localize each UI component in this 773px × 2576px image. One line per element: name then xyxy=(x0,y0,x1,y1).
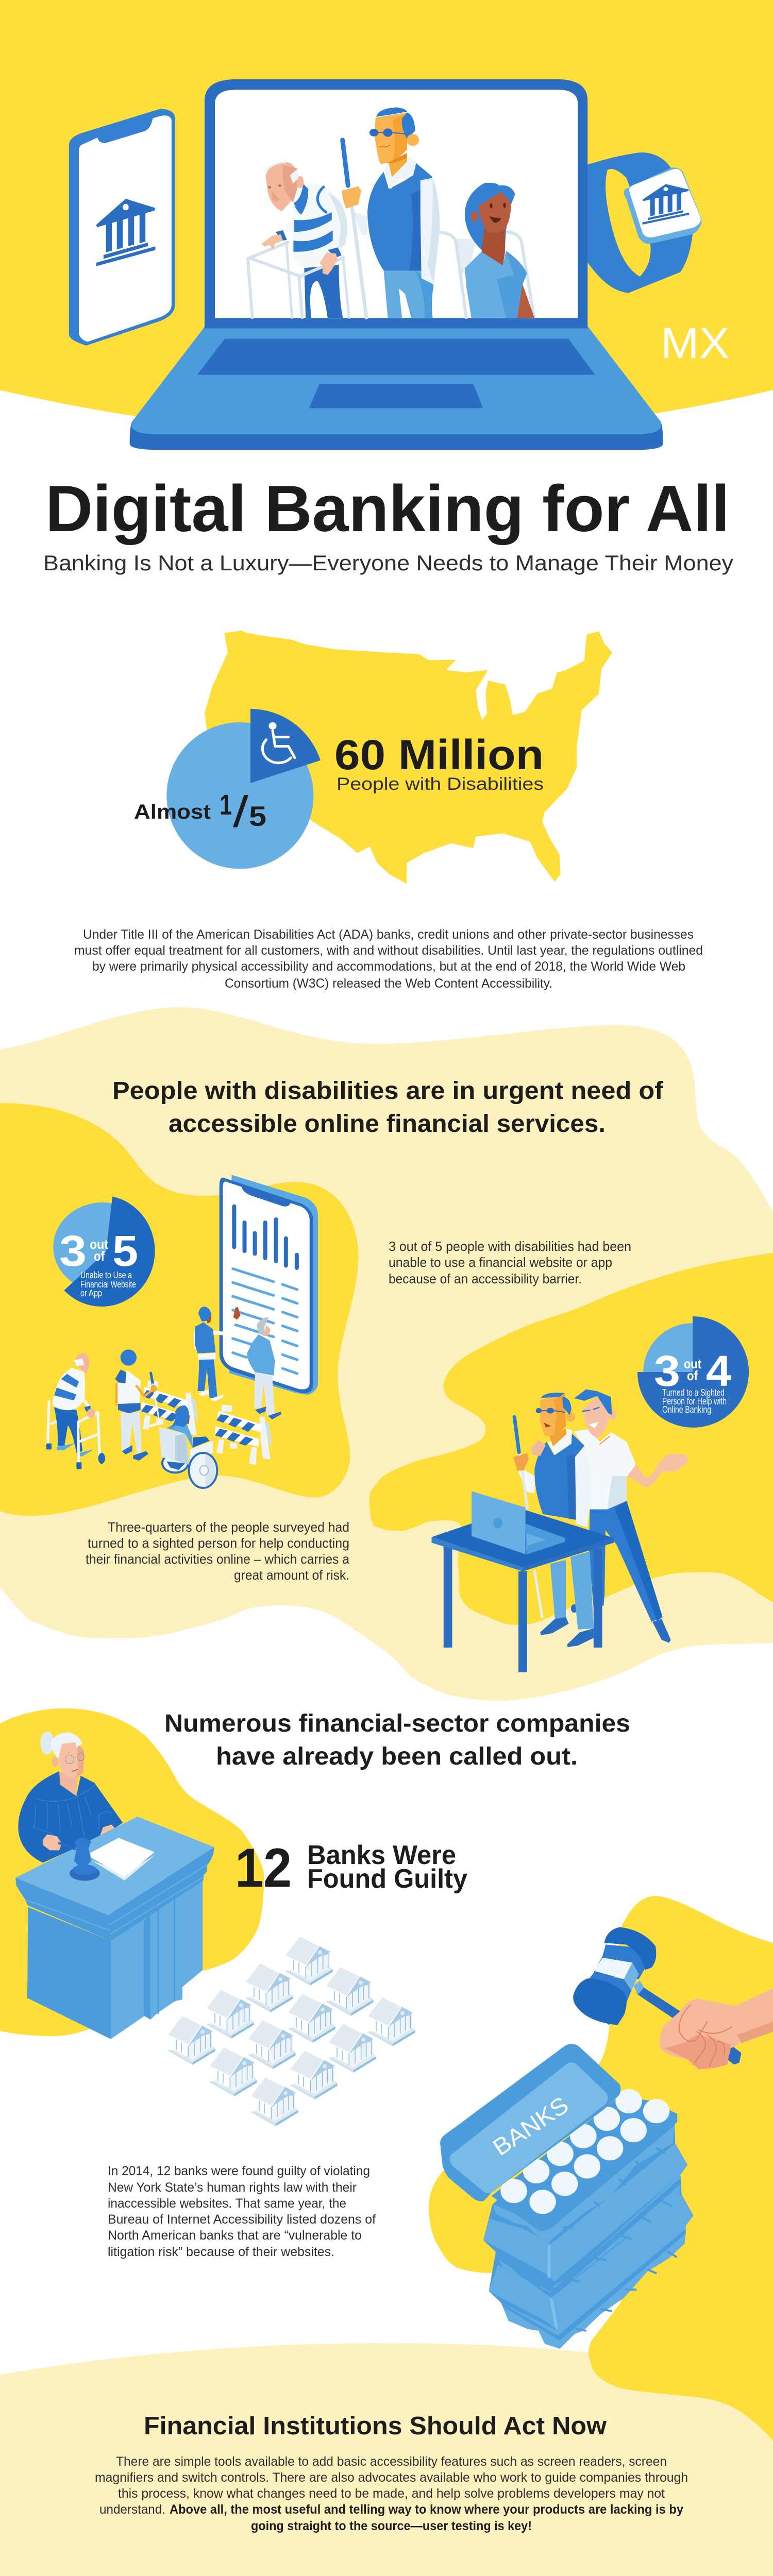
stat: almost one fifth: Almost xyxy=(134,801,211,823)
pie chart: 3 out of 5: or App xyxy=(80,1288,102,1298)
pie chart: 3 out of 5: Financial Website xyxy=(80,1279,136,1290)
text: act now paragraph xyxy=(95,2454,688,2533)
text: 3 out of 5 unable xyxy=(389,1239,631,1286)
barrier xyxy=(141,1381,198,1441)
text: 2014 banks found guilty: inaccessible websites. That same year, the xyxy=(108,2196,346,2211)
text: act now paragraph: this process, know what changes need to be made, and help solve problems developers may not xyxy=(118,2486,665,2501)
section heading: urgent need xyxy=(112,1077,664,1138)
pie chart: 3 out of 4: out xyxy=(684,1356,701,1371)
background blob: right yellow xyxy=(429,1896,773,2441)
title: Digital Banking for All xyxy=(45,472,730,545)
person: tall man with cane and glasses xyxy=(342,107,440,318)
stat: 12 banks found guilty: Banks Were xyxy=(307,1840,456,1870)
stat: 60 million xyxy=(334,732,544,794)
map and pie chart xyxy=(166,631,612,884)
pie chart: 3 out of 4 xyxy=(637,1316,749,1428)
background blob: lower pale yellow section xyxy=(0,2343,773,2576)
person: old man with walker xyxy=(46,1353,105,1469)
person: woman with cane xyxy=(115,1349,160,1461)
person: woman in wheelchair xyxy=(441,183,534,318)
text: act now paragraph: There are simple tools available to add basic accessibility features such as screen readers, screen xyxy=(116,2454,667,2469)
stat: 12 banks found guilty xyxy=(235,1837,467,1899)
section heading: called out: Numerous financial-sector companies xyxy=(164,1710,630,1737)
illustration: sighted friend helping at laptop xyxy=(431,1389,688,1672)
text: 2014 banks found guilty xyxy=(108,2164,376,2259)
subtitle: Banking Is Not a Luxury—Everyone Needs to Manage Their Money xyxy=(43,551,733,575)
stat: almost one fifth: 5 xyxy=(249,800,266,832)
text: three-quarters sighted help: turned to a sighted person for help conducting xyxy=(88,1535,349,1551)
gavel, hand and egg cartons xyxy=(440,1927,773,2349)
stat: almost one fifth xyxy=(134,788,266,837)
people on laptop screen xyxy=(248,107,534,318)
person: friend in white shirt xyxy=(571,1389,688,1643)
illustration: people at inaccessible phone xyxy=(46,1307,281,1488)
pie chart: 3 out of 4: of xyxy=(687,1368,698,1383)
hero devices xyxy=(69,79,701,450)
text: act now paragraph: going straight to the source—user testing is key! xyxy=(251,2519,532,2533)
stat: 12 banks found guilty: 12 xyxy=(235,1837,292,1899)
intro paragraph: Under Title III of the American Disabilities Act (ADA) banks, credit unions and other private-sector businesses xyxy=(83,927,694,942)
carton lid xyxy=(440,2044,620,2201)
pie chart: 3 out of 5 xyxy=(53,1196,155,1307)
stacked tray backing xyxy=(483,2096,693,2349)
text: 3 out of 5 unable: 3 out of 5 people with disabilities had been xyxy=(389,1239,631,1254)
section heading: called out xyxy=(164,1710,630,1770)
gavel xyxy=(573,1927,742,2064)
text: 3 out of 5 unable: unable to use a financial website or app xyxy=(389,1255,612,1270)
text: 2014 banks found guilty: North American banks that are “vulnerable to xyxy=(108,2228,362,2243)
person: judge xyxy=(18,1732,123,1863)
intro paragraph: must offer equal treatment for all customers, with and without disabilities. Until last year, the regulations outlined xyxy=(74,943,703,958)
bottom egg tray xyxy=(489,2194,693,2349)
text: 2014 banks found guilty: In 2014, 12 banks were found guilty of violating xyxy=(108,2164,370,2178)
background blob: right yellow xyxy=(369,1253,773,1625)
person: pointing at phone xyxy=(194,1307,241,1402)
text: act now paragraph: magnifiers and switch controls. There are also advocates available who work to guide companies through xyxy=(95,2470,688,2485)
icon: smartphone xyxy=(69,109,175,346)
background blob: left yellow xyxy=(0,1103,358,1516)
stat: 12 banks found guilty: Found Guilty xyxy=(307,1864,467,1894)
text: three-quarters sighted help: Three-quarters of the people surveyed had xyxy=(108,1519,349,1535)
intro paragraph: by were primarily physical accessibility and accommodations, but at the end of 2018, the World Wide Web xyxy=(92,959,685,974)
stat: 60 million: 60 Million xyxy=(334,732,544,778)
section heading: urgent need: accessible online financial services. xyxy=(169,1110,606,1138)
pie chart: 3 out of 4: 4 xyxy=(706,1347,731,1395)
barrier xyxy=(215,1405,272,1465)
text: three-quarters sighted help xyxy=(86,1519,350,1583)
twelve bank buildings xyxy=(169,1937,415,2126)
text: act now paragraph: Above all, the most useful and telling way to know where your products are lacking is by xyxy=(170,2502,683,2517)
text: 2014 banks found guilty: New York State’s human rights law with their xyxy=(108,2180,357,2195)
carton label: BANKS xyxy=(488,2091,573,2161)
person: old man with walker xyxy=(248,161,349,318)
person: blind man with glasses xyxy=(513,1393,594,1647)
pie chart: 3 out of 5: Unable to Use a xyxy=(80,1270,132,1280)
pie chart: 3 out of 4: 3 xyxy=(654,1347,680,1395)
text: three-quarters sighted help: great amount of risk. xyxy=(234,1567,349,1583)
text: act now paragraph: understand. xyxy=(99,2502,165,2517)
hero background xyxy=(0,0,773,435)
stat: 60 million: People with Disabilities xyxy=(337,774,544,794)
icon: smartwatch xyxy=(584,152,701,293)
person: in wheelchair xyxy=(150,1405,217,1488)
intro paragraph xyxy=(74,927,703,991)
gavel xyxy=(59,1838,100,1881)
podium xyxy=(15,1817,214,2039)
stat: almost one fifth: / xyxy=(233,788,248,837)
section heading: act now: Financial Institutions Should Act Now xyxy=(144,2412,607,2440)
intro paragraph: Consortium (W3C) released the Web Content Accessibility. xyxy=(225,976,552,991)
MX logo: MX xyxy=(661,319,730,367)
pie chart: almost one fifth xyxy=(166,709,321,869)
stat: almost one fifth: 1 xyxy=(220,788,232,821)
background blob: pale yellow section xyxy=(0,1007,773,1701)
middle egg tray xyxy=(483,2143,687,2295)
pie chart: 3 out of 5: of xyxy=(94,1248,105,1264)
pie chart: 3 out of 4: Online Banking xyxy=(662,1404,711,1415)
background blob: judge yellow xyxy=(0,1708,264,2036)
hand holding gavel xyxy=(660,1988,773,2070)
section heading: urgent need: People with disabilities are in urgent need of xyxy=(112,1077,664,1105)
papers xyxy=(90,1838,156,1880)
large phone with chart xyxy=(220,1175,318,1395)
pie chart: 3 out of 4: Turned to a Sighted xyxy=(662,1387,725,1398)
pie chart: 3 out of 5: 5 xyxy=(112,1227,138,1275)
US map xyxy=(205,631,612,884)
person: gray-haired man xyxy=(247,1317,281,1419)
cane lower part xyxy=(534,1571,542,1617)
text: three-quarters sighted help: their financial activities online – which carries a xyxy=(86,1551,350,1567)
text: 2014 banks found guilty: Bureau of Internet Accessibility listed dozens of xyxy=(108,2212,376,2227)
text: 2014 banks found guilty: litigation risk” because of their websites. xyxy=(108,2245,334,2259)
section heading: called out: have already been called out. xyxy=(216,1743,578,1770)
table xyxy=(431,1511,614,1672)
pie chart: 3 out of 5: out xyxy=(90,1236,108,1252)
judge illustration xyxy=(15,1732,214,2039)
pie chart: 3 out of 5: 3 xyxy=(59,1227,87,1275)
laptop on table xyxy=(472,1492,565,1554)
icon: wheelchair xyxy=(262,722,295,763)
laptop xyxy=(130,79,663,450)
text: 3 out of 5 unable: because of an accessibility barrier. xyxy=(389,1271,582,1286)
top egg tray with eggs xyxy=(492,2089,677,2242)
pie chart: 3 out of 4: Person for Help with xyxy=(662,1396,727,1406)
